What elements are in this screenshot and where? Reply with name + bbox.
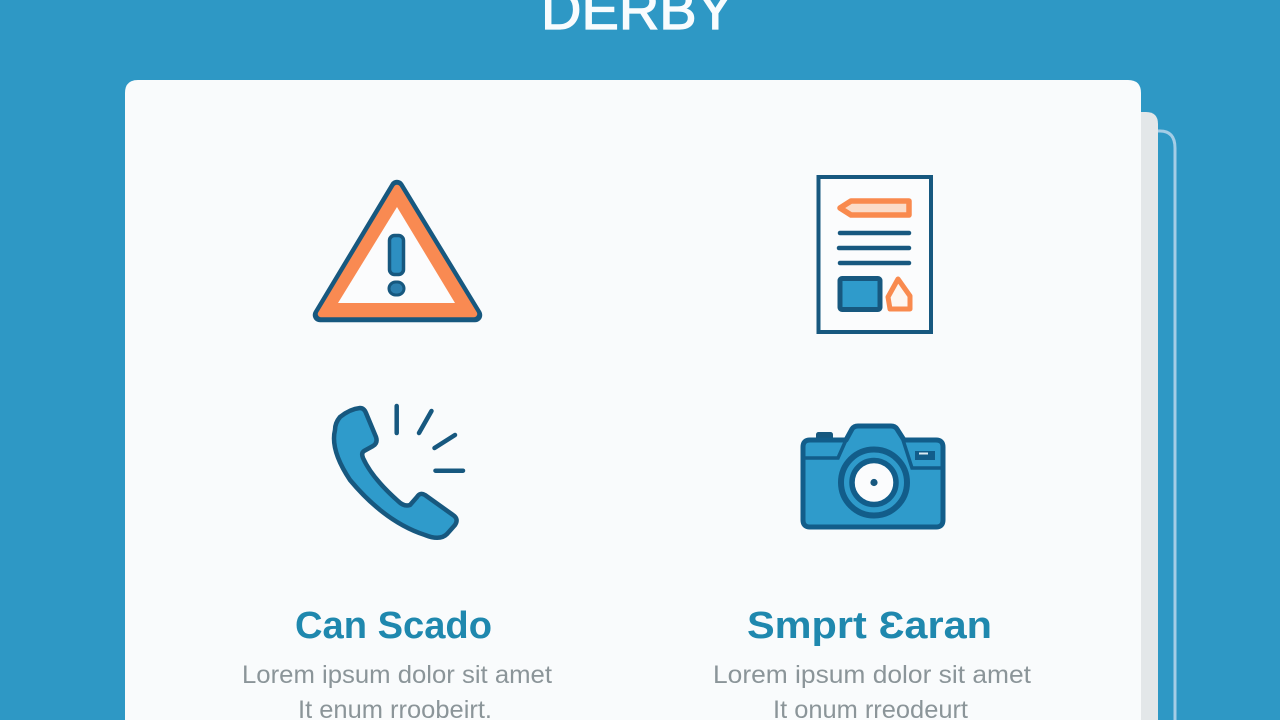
middle page layer — [1130, 112, 1158, 720]
text block: right column — [713, 605, 1031, 720]
icon: document — [818, 177, 931, 332]
heading: right: Smprt Ɛaran — [747, 605, 992, 647]
body text: right line 1: Lorem ipsum dolor sit amet — [713, 661, 1031, 689]
heading: left: Can Scado — [295, 605, 492, 647]
body text: left line 1: Lorem ipsum dolor sit amet — [242, 661, 552, 689]
main card — [125, 80, 1141, 720]
text block: left column — [242, 605, 552, 720]
icon: warning triangle — [320, 187, 475, 315]
icon: telephone — [334, 406, 463, 538]
back page outline — [1157, 131, 1175, 720]
icon: camera — [803, 426, 943, 527]
